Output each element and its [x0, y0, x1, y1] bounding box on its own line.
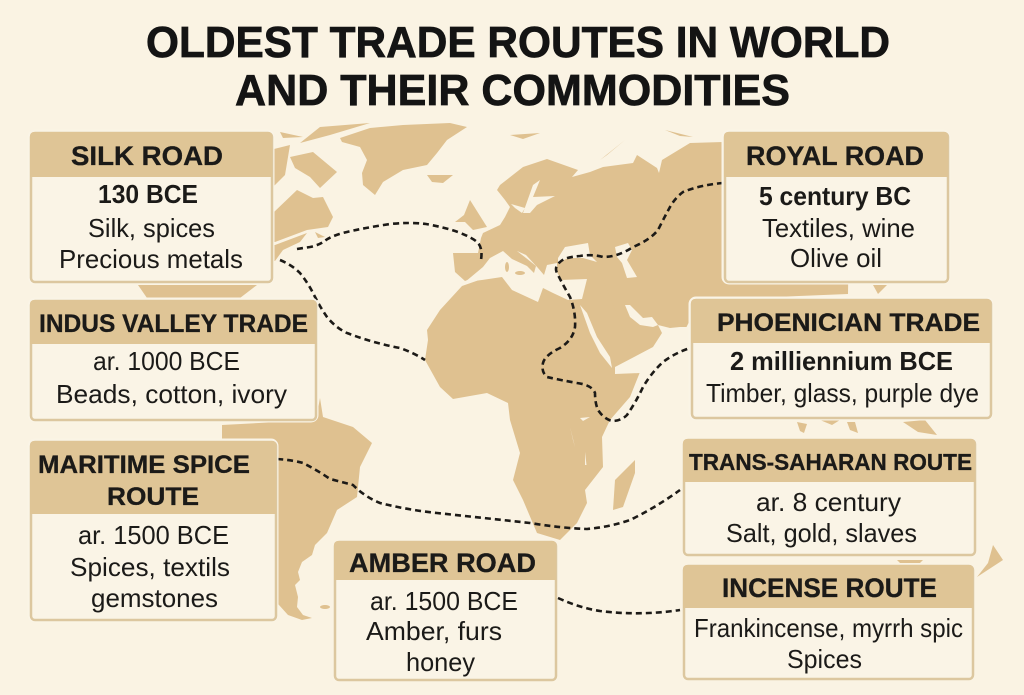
- panel: Silk Road: SILK ROAD: [71, 141, 223, 171]
- panel: Indus Valley Trade: Beads, cotton, ivory: [56, 379, 287, 409]
- panel: Royal Road: 5 century BC: [759, 181, 911, 211]
- panel: Royal Road: [724, 132, 948, 282]
- panel: Royal Road: Textiles, wine: [762, 213, 915, 243]
- panel: Trans-Saharan Route: TRANS-SAHARAN ROUTE: [689, 449, 972, 475]
- panel: Amber Road: [334, 541, 556, 680]
- panel: Royal Road: Olive oil: [790, 243, 882, 273]
- panel: Trans-Saharan Route: [683, 439, 975, 555]
- panel: Indus Valley Trade: [30, 300, 316, 420]
- title: [146, 18, 890, 115]
- panel: Silk Road: [30, 132, 272, 282]
- panel: Maritime Spice Route: [30, 441, 276, 620]
- panel: Phoenician Trade: Timber, glass, purple dye: [706, 378, 979, 408]
- panel: Maritime Spice Route: Spices, textils: [70, 552, 230, 582]
- panel: Phoenician Trade: [691, 299, 991, 418]
- panel: Amber Road: Amber, furs: [366, 616, 502, 646]
- panel: Phoenician Trade: PHOENICIAN TRADE: [717, 309, 980, 337]
- panel: Incense Route: Spices: [787, 644, 862, 674]
- title: AND THEIR COMMODITIES: [235, 66, 790, 115]
- panel: Maritime Spice Route: ROUTE: [107, 483, 199, 511]
- panel: Indus Valley Trade: INDUS VALLEY TRADE: [39, 310, 308, 338]
- title: OLDEST TRADE ROUTES IN WORLD: [146, 18, 890, 67]
- panel: Maritime Spice Route: MARITIME SPICE: [38, 451, 250, 479]
- trade route lines: [277, 183, 723, 613]
- panel: Incense Route: INCENSE ROUTE: [722, 573, 937, 603]
- panel: Maritime Spice Route: ar. 1500 BCE: [78, 520, 229, 550]
- panel: Maritime Spice Route: gemstones: [91, 583, 218, 613]
- panel: Silk Road: Silk, spices: [88, 213, 215, 243]
- panel: Incense Route: Frankincense, myrrh spic: [694, 613, 963, 643]
- panel: Silk Road: 130 BCE: [98, 179, 198, 209]
- panel: Silk Road: Precious metals: [59, 244, 243, 274]
- panel: Royal Road: ROYAL ROAD: [746, 141, 924, 171]
- panel: Phoenician Trade: 2 milliennium BCE: [730, 346, 953, 376]
- panel: Amber Road: ar. 1500 BCE: [370, 586, 518, 616]
- panel: Indus Valley Trade: ar. 1000 BCE: [93, 346, 240, 376]
- world map: [138, 123, 1003, 620]
- panel: Trans-Saharan Route: ar. 8 century: [756, 487, 901, 517]
- panel: Amber Road: honey: [406, 647, 475, 677]
- panel: Amber Road: AMBER ROAD: [349, 548, 536, 578]
- panel: Trans-Saharan Route: Salt, gold, slaves: [726, 518, 917, 548]
- panel: Incense Route: [683, 565, 973, 679]
